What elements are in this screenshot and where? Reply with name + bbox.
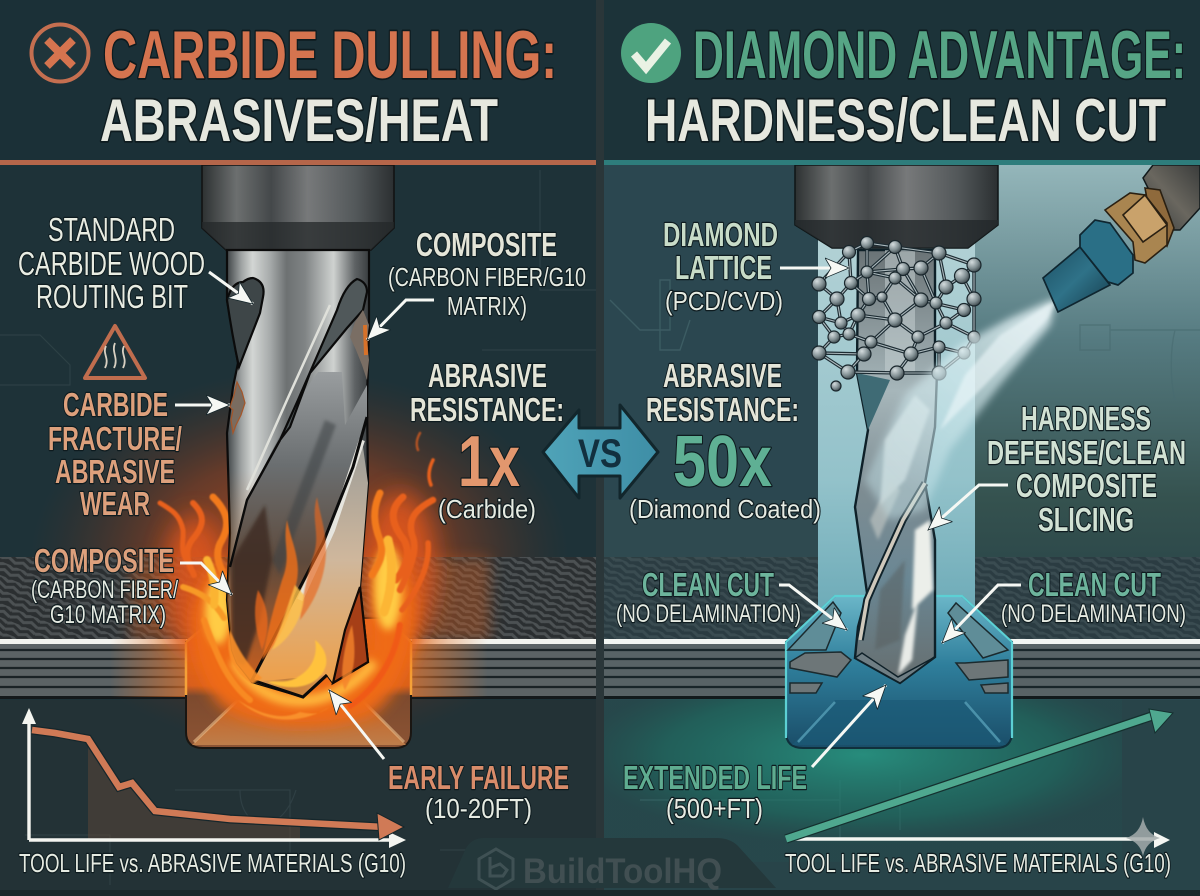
heading line 1: CARBIDE DULLING: (103, 17, 557, 93)
header band left (0, 0, 596, 165)
bright cutting edge (300, 440, 362, 600)
flames behind bit (160, 433, 436, 727)
laminate layers (0, 639, 596, 699)
label: composite upper: COMPOSITE (416, 226, 557, 263)
blueprint watermark (610, 280, 1200, 840)
label: carbide fracture (48, 386, 182, 522)
light strip along flute (247, 305, 330, 490)
carbon fiber composite band (604, 557, 1200, 641)
upper flute (280, 279, 367, 440)
label: diamond lattice (663, 216, 783, 316)
fracture left (230, 382, 245, 433)
cut pocket (186, 618, 411, 748)
watermark logo tab (448, 838, 776, 891)
pocket floor (192, 700, 406, 745)
arrow: hardness defense (928, 485, 1008, 530)
stat: abrasive resistance 1x: 1x (458, 422, 520, 502)
bit body (855, 250, 937, 683)
icon: heat warning triangle (85, 326, 145, 378)
axes (29, 716, 400, 840)
carbon fiber composite band (0, 557, 596, 641)
outer wisps (160, 433, 433, 706)
right tip facet (252, 440, 368, 683)
label: clean cut left (616, 566, 801, 628)
green glow (604, 697, 1122, 862)
arrow: extended life (812, 685, 886, 767)
light beam (818, 240, 975, 640)
label: composite upper: MATRIX) (447, 291, 527, 321)
label: standard carbide wood routing bit: STANDARD (48, 211, 175, 248)
vs text: VS (578, 432, 622, 476)
panel: carbide dulling (0, 0, 596, 892)
label: clean cut left: (NO DELAMINATION) (616, 600, 801, 628)
chart: carbide tool life (22, 708, 406, 848)
stat: abrasive resistance 50x: ABRASIVE (663, 357, 782, 394)
flames in front of bit (228, 497, 354, 720)
brass nut (1105, 188, 1174, 263)
coolant spray (865, 298, 1056, 520)
label: carbide fracture: WEAR (80, 485, 150, 522)
label: carbide fracture: FRACTURE/ (48, 420, 182, 457)
declining life curve (32, 730, 385, 827)
stat: abrasive resistance 50x (629, 357, 821, 524)
arrow: composite upper (367, 300, 434, 340)
vs double arrow (543, 405, 658, 498)
label: extended life: EXTENDED LIFE (623, 759, 807, 796)
title: carbide dulling (32, 17, 557, 154)
label: extended life (623, 759, 807, 824)
chart caption left: TOOL LIFE vs. ABRASIVE MATERIALS (G10) (19, 848, 406, 878)
label: early failure (388, 759, 569, 824)
label: composite upper (388, 226, 586, 321)
coolant nozzle (1043, 165, 1200, 312)
upper left flute (227, 278, 264, 367)
arrow: early failure (329, 690, 384, 759)
dark lower wedge (333, 587, 368, 683)
arrow: standard bit (209, 272, 253, 304)
delaminated fibers (788, 602, 1008, 693)
blade highlights (870, 395, 933, 675)
heading line 2: ABRASIVES/HEAT (100, 87, 498, 154)
flame mass (191, 554, 416, 727)
sparkle (1126, 817, 1160, 856)
arrow: composite lower (180, 563, 232, 595)
label: clean cut right (1001, 566, 1186, 628)
collet (795, 165, 998, 248)
center divider (596, 0, 604, 892)
dark streak (272, 420, 336, 575)
label: hardness defense (987, 400, 1186, 538)
label: composite lower (31, 542, 178, 629)
panel: diamond advantage (604, 0, 1200, 892)
clean cut pocket (786, 596, 1012, 748)
arrow: clean cut right (942, 585, 1021, 643)
stat: abrasive resistance 50x: 50x (673, 422, 772, 502)
bottom edge (0, 890, 1200, 896)
hot yellow core (205, 546, 402, 701)
heat tint (227, 470, 368, 697)
stat: abrasive resistance 1x: RESISTANCE: (410, 391, 564, 428)
fire glow background (30, 370, 570, 750)
brown chart shade (88, 742, 300, 840)
laminate layers (604, 639, 1200, 699)
label: standard carbide wood routing bit: ROUTING BIT (36, 278, 188, 315)
helical strip (860, 483, 925, 640)
label: early failure: (10-20FT) (425, 793, 532, 824)
label: diamond lattice: DIAMOND (663, 216, 778, 253)
stat: abrasive resistance 1x: (Carbide) (438, 494, 536, 524)
tip band (855, 653, 935, 683)
diamond lattice (812, 236, 981, 391)
stat: abrasive resistance 50x: (Diamond Coated) (629, 494, 821, 524)
blue nozzle (1043, 220, 1133, 312)
coolant-lit back wall (975, 165, 1200, 557)
icon: check circle (621, 23, 681, 83)
collet (202, 165, 394, 250)
bit body (227, 250, 369, 697)
shank highlights (885, 250, 915, 372)
label: carbide fracture: CARBIDE (63, 386, 168, 423)
rising life arrow (786, 716, 1152, 839)
label: extended life: (500+FT) (666, 793, 763, 824)
chart: diamond tool life (786, 709, 1173, 856)
logo wordmark: BuildToolHQ (523, 852, 722, 891)
label: clean cut left: CLEAN CUT (642, 566, 774, 603)
blueprint watermark (0, 170, 596, 885)
label: composite lower: (CARBON FIBER/ (31, 576, 178, 604)
arrow: clean cut left (779, 585, 847, 630)
stat: abrasive resistance 1x: ABRASIVE (428, 357, 547, 394)
label: hardness defense: SLICING (1038, 501, 1134, 538)
stat: abrasive resistance 1x (410, 357, 564, 524)
title: diamond advantage (621, 17, 1186, 154)
arrow: carbide fracture (175, 404, 230, 406)
label: carbide fracture: ABRASIVE (55, 453, 175, 490)
arrow: diamond lattice (780, 266, 849, 270)
label: composite upper: (CARBON FIBER/G10 (388, 262, 586, 292)
logo hexagon (479, 849, 513, 889)
label: diamond lattice: (PCD/CVD) (665, 286, 783, 316)
icon: x circle (32, 24, 88, 82)
label: composite lower: COMPOSITE (34, 542, 174, 579)
carbide routing bit (202, 165, 394, 697)
hose (1143, 165, 1200, 230)
header band right (604, 0, 1200, 165)
label: early failure: EARLY FAILURE (388, 759, 569, 796)
dark lower flute (232, 505, 272, 665)
upper dark flute (857, 373, 890, 430)
stat: abrasive resistance 50x: RESISTANCE: (646, 391, 799, 428)
central helical body (230, 372, 367, 680)
label: composite lower: G10 MATRIX) (50, 601, 166, 629)
wide side heat (163, 492, 436, 655)
x axis (791, 837, 1160, 841)
fracture right (350, 310, 369, 380)
label: diamond lattice: LATTICE (675, 249, 772, 286)
label: standard carbide wood routing bit (18, 211, 205, 315)
diamond-coated bit (795, 165, 998, 683)
label: standard carbide wood routing bit: CARBIDE WOOD (18, 245, 205, 282)
